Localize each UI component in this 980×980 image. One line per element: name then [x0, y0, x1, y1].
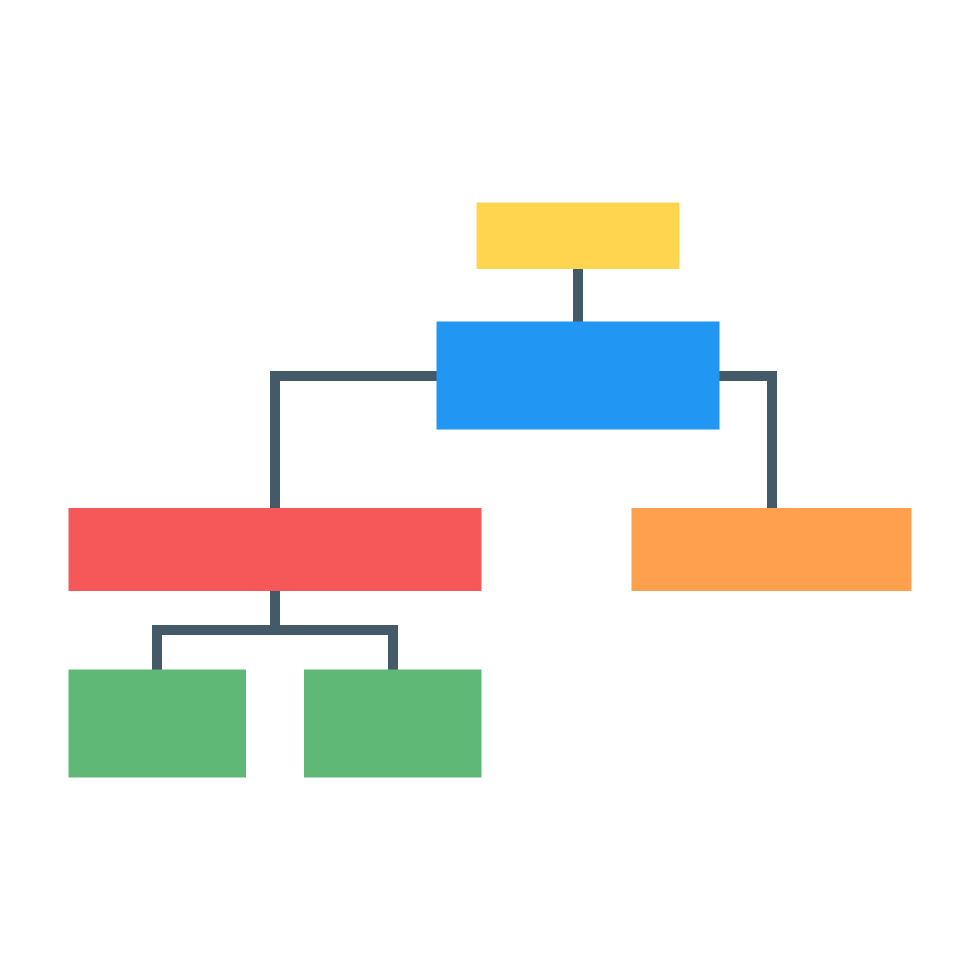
box: yellow top node [476, 202, 680, 269]
box: blue node [436, 322, 720, 430]
box: green left node [68, 670, 246, 778]
box: green right node [304, 670, 482, 778]
connector: blue to red [275, 376, 437, 509]
connector: red to green boxes [157, 590, 393, 670]
box: orange node [632, 508, 912, 591]
connector: blue to orange [719, 376, 772, 509]
box: red node [68, 508, 482, 591]
connector: yellow to blue [573, 268, 583, 322]
